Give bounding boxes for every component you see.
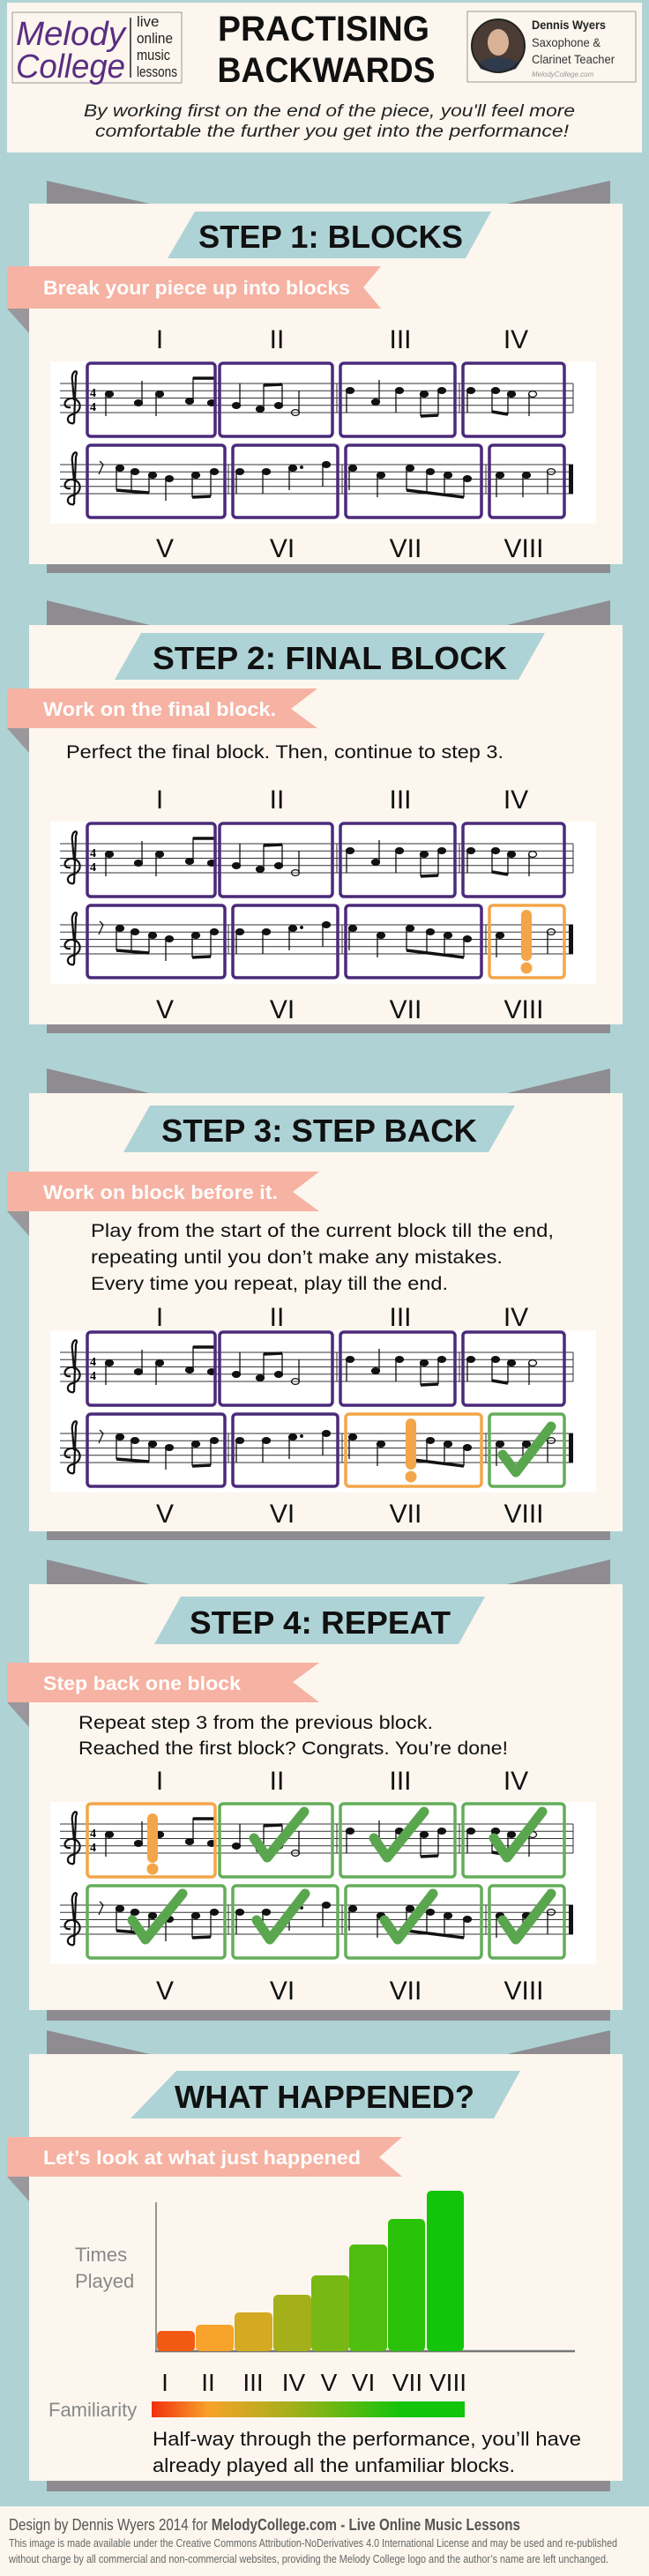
score: repeat all checked [50, 1802, 596, 1964]
logo: Melody College: music [137, 47, 170, 63]
bar chart: times played: II [201, 2369, 215, 2396]
numerals top: III [389, 1303, 412, 1332]
panel: what happened [7, 2030, 623, 2491]
text: conclusion: already played all the unfamiliar blocks. [153, 2454, 515, 2476]
logo: Melody College [12, 12, 182, 86]
familiarity scale: Familiarity [48, 2399, 137, 2421]
numerals top [156, 785, 528, 815]
numerals top: III [389, 785, 412, 815]
teacher card: Clarinet Teacher [532, 52, 615, 66]
score: final block highlighted [50, 822, 596, 984]
logo: Melody College: College [16, 48, 125, 86]
text: instructions: Play from the start of the current block till the end, [91, 1221, 554, 1241]
teacher card [467, 11, 636, 82]
text: perfect final block: Perfect the final block. Then, continue to step 3. [66, 742, 504, 763]
numerals bottom: VIII [504, 534, 544, 563]
footer: Design by Dennis Wyers 2014 for MelodyCollege.com - Live Online Music Lessons [9, 2516, 520, 2534]
heading: step 2 [115, 633, 545, 680]
icon: exclamation [146, 1813, 159, 1874]
bar chart: times played: IV [282, 2369, 306, 2396]
heading: step 1: STEP 1: BLOCKS [198, 219, 463, 255]
panel: step 4 [7, 1560, 623, 2021]
bar chart: times played: Played [75, 2270, 134, 2292]
text: conclusion: Half-way through the performance, you’ll have [153, 2428, 581, 2450]
numerals bottom: VI [270, 995, 295, 1024]
icon: exclamation [406, 1418, 416, 1483]
icon: checkmark [503, 1426, 551, 1472]
text: conclusion [153, 2428, 581, 2476]
text: instructions: Every time you repeat, play till the end. [91, 1274, 448, 1294]
ribbon: step back one block: Step back one block [43, 1672, 242, 1694]
numerals top: I [156, 325, 163, 354]
panel: step 2 [7, 600, 623, 1033]
numerals top [156, 325, 528, 354]
footer [0, 2506, 649, 2576]
bar chart: times played: VI [352, 2369, 375, 2396]
bar chart: times played: I [161, 2369, 168, 2396]
numerals bottom: VIII [504, 1500, 544, 1529]
numerals bottom [156, 534, 544, 563]
text: repeat: Repeat step 3 from the previous block. [78, 1713, 433, 1733]
numerals bottom: VIII [504, 1977, 544, 2006]
heading: step 4: STEP 4: REPEAT [190, 1604, 451, 1641]
ribbon: break piece into blocks: Break your piece up into blocks [43, 277, 350, 299]
heading: step 4 [154, 1597, 485, 1644]
numerals top [156, 1303, 528, 1332]
numerals top: II [270, 1767, 284, 1796]
tagline [84, 102, 575, 141]
panel: step 3 [7, 1068, 623, 1540]
heading: step 1 [168, 212, 491, 258]
logo: Melody College: live [137, 13, 160, 30]
bar chart: times played: Times [75, 2244, 127, 2266]
bar chart: times played: V [321, 2369, 338, 2396]
numerals top: I [156, 1303, 163, 1332]
numerals bottom: VII [390, 995, 421, 1024]
teacher card: MelodyCollege.com [532, 71, 594, 78]
teacher card: Dennis Wyers [532, 18, 606, 32]
bar chart: times played: III [242, 2369, 264, 2396]
icon: exclamation [520, 910, 533, 973]
numerals bottom: VI [270, 1977, 295, 2006]
bar chart: times played: VII [392, 2369, 422, 2396]
ribbon: let's look [7, 2137, 402, 2201]
numerals top: II [270, 1303, 284, 1332]
icon: teacher photo [472, 19, 525, 72]
title: BACKWARDS [217, 51, 436, 90]
ribbon: work on final block: Work on the final block. [43, 698, 276, 720]
numerals top: II [270, 325, 284, 354]
numerals top: I [156, 785, 163, 815]
ribbon: work on block before: Work on block before it. [43, 1181, 278, 1203]
icons: checkmarks [132, 1812, 551, 1939]
bar chart: times played [75, 2191, 575, 2396]
heading: step 3: STEP 3: STEP BACK [161, 1113, 477, 1149]
logo: Melody College: Melody [16, 16, 127, 53]
teacher card: Saxophone & [532, 35, 601, 49]
score: step back [50, 1330, 596, 1493]
text: instructions [91, 1221, 554, 1294]
ribbon: break piece into blocks [7, 266, 381, 333]
panel: step 1 [7, 181, 623, 573]
bar chart: times played: VIII [429, 2369, 466, 2396]
heading: what happened [131, 2071, 520, 2118]
numerals top: III [389, 325, 412, 354]
ribbon: work on final block [7, 689, 317, 753]
numerals top: II [270, 785, 284, 815]
numerals bottom: V [156, 1977, 174, 2006]
numerals top: IV [504, 1303, 528, 1332]
numerals bottom: VIII [504, 995, 544, 1024]
text: instructions: repeating until you don’t make any mistakes. [91, 1247, 503, 1268]
numerals bottom: VII [390, 1977, 421, 2006]
numerals top: III [389, 1767, 412, 1796]
heading: step 3 [123, 1106, 515, 1152]
text: repeat: Reached the first block? Congrats. You’re done! [78, 1738, 508, 1759]
numerals top [156, 1767, 528, 1796]
familiarity scale [48, 2399, 465, 2421]
numerals bottom: VI [270, 534, 295, 563]
numerals bottom: VI [270, 1500, 295, 1529]
numerals top: IV [504, 1767, 528, 1796]
ribbon: let's look: Let’s look at what just happened [43, 2147, 361, 2169]
numerals bottom [156, 1977, 544, 2006]
numerals top: I [156, 1767, 163, 1796]
numerals bottom: V [156, 995, 174, 1024]
title: PRACTISING [218, 10, 429, 48]
numerals bottom: V [156, 534, 174, 563]
tagline: By working first on the end of the piece, you'll feel more [84, 102, 575, 121]
ribbon: work on block before [7, 1172, 319, 1236]
numerals bottom: V [156, 1500, 174, 1529]
text: repeat [78, 1713, 508, 1759]
numerals bottom: VII [390, 534, 421, 563]
numerals bottom: VII [390, 1500, 421, 1529]
logo: Melody College: lessons [137, 63, 177, 80]
ribbon: step back one block [7, 1663, 319, 1727]
numerals bottom [156, 995, 544, 1024]
numerals top: IV [504, 325, 528, 354]
logo: Melody College: online [137, 30, 173, 47]
title [217, 10, 436, 90]
heading: what happened: WHAT HAPPENED? [175, 2079, 474, 2115]
numerals top: IV [504, 785, 528, 815]
numerals bottom [156, 1500, 544, 1529]
score: blocks [50, 361, 596, 524]
tagline: comfortable the further you get into the performance! [95, 123, 570, 141]
heading: step 2: STEP 2: FINAL BLOCK [153, 640, 507, 676]
header panel [7, 3, 642, 153]
